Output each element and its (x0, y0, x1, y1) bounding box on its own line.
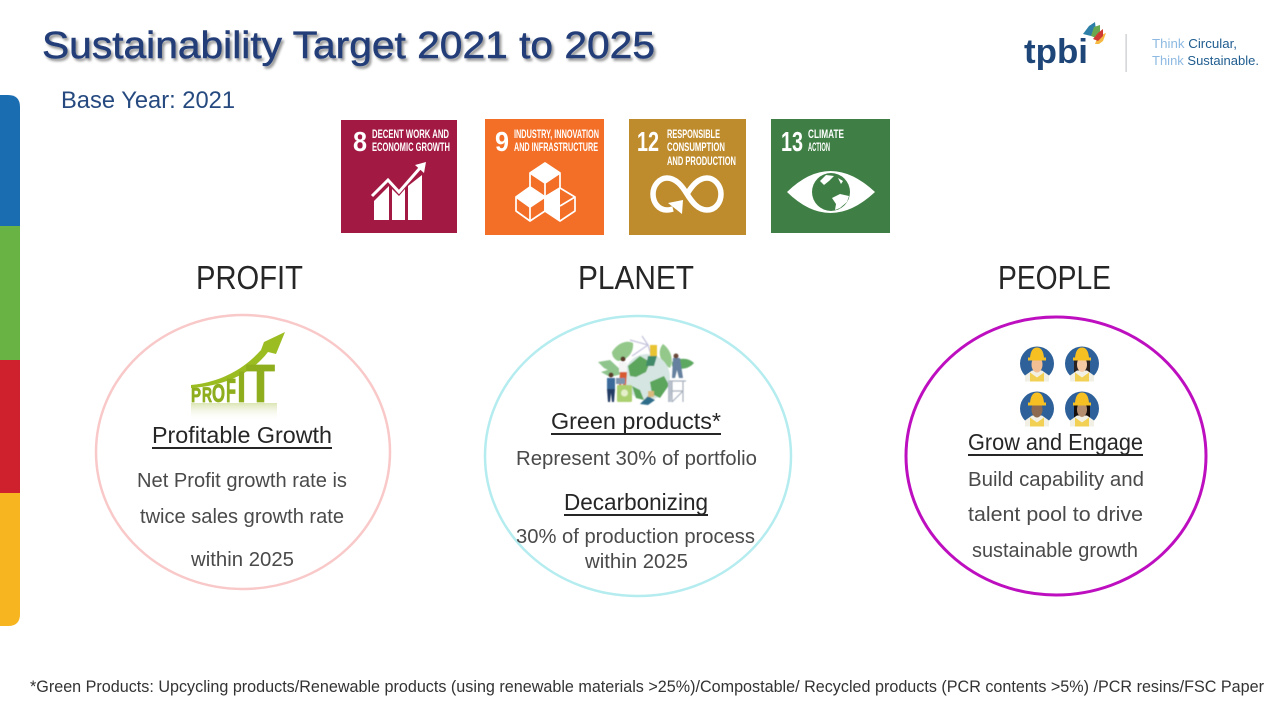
left colour bar (0, 95, 20, 626)
text: profit target: Net Profit growth rate is (137, 469, 347, 492)
logo divider (1126, 34, 1127, 72)
icon: SDG 13 climate action: ACTION (808, 142, 830, 154)
icon: SDG 9 industry: INDUSTRY, INNOVATION (514, 129, 599, 141)
icon: SDG 12 responsible consumption (629, 119, 746, 235)
icon: SDG 13 climate action (771, 119, 890, 233)
worker: top right (1065, 346, 1099, 382)
icon: profit growth arrow: P (191, 385, 201, 407)
text: decarbonizing heading: Decarbonizing (564, 489, 708, 515)
heading: profit: PROFIT (196, 259, 303, 296)
text: profitable growth heading: Profitable Growth (152, 422, 332, 448)
text: green products target: Represent 30% of portfolio (516, 447, 757, 470)
text: people target (968, 468, 1144, 562)
text: decarbonizing target: 30% of production process (516, 525, 755, 548)
panel: people circle (906, 317, 1206, 595)
icon: SDG 9 industry: 9 (495, 126, 509, 157)
text: people target: sustainable growth (972, 539, 1138, 562)
text: grow and engage heading: Grow and Engage (968, 429, 1143, 455)
logo tagline (1152, 37, 1259, 68)
icon: profit growth arrow: T (246, 354, 275, 414)
text: profit target: twice sales growth rate (140, 505, 344, 528)
icon: SDG 12 responsible consumption: RESPONSIBLE (667, 129, 720, 141)
icon: SDG 8 decent work: 8 (353, 126, 367, 157)
icon: profit growth arrow: R (202, 384, 212, 407)
title: Sustainability Target 2021 to 2025 (42, 25, 655, 67)
text: decarbonizing target: within 2025 (584, 550, 688, 573)
logo tagline: Think Sustainable. (1152, 54, 1259, 68)
icon: SDG 12 responsible consumption: AND PRODUCTION (667, 156, 736, 168)
text: people target: talent pool to drive (968, 503, 1143, 526)
text: profit target: within 2025 (190, 548, 294, 571)
heading: people: PEOPLE (998, 259, 1111, 296)
icon: SDG 12 responsible consumption: 12 (637, 126, 659, 157)
subtitle: base year: Base Year: 2021 (61, 87, 235, 114)
icon: SDG 12 responsible consumption: CONSUMPTION (667, 142, 725, 154)
panel: planet circle (485, 316, 791, 596)
logo: tpbi (1024, 22, 1259, 72)
icon: four workers (1020, 346, 1099, 426)
icon: SDG 8 decent work: DECENT WORK AND (372, 129, 449, 141)
worker: bottom left (1020, 392, 1054, 426)
worker: bottom right (1065, 392, 1099, 426)
icon: SDG 13 climate action: CLIMATE (808, 129, 844, 141)
icon: SDG 8 decent work: ECONOMIC GROWTH (372, 142, 450, 154)
text: decarbonizing target (516, 525, 755, 573)
text: green products heading: Green products* (551, 408, 721, 434)
logo leaves (1083, 22, 1106, 44)
logo tagline: Think Circular, (1152, 37, 1237, 51)
heading: planet: PLANET (578, 259, 694, 296)
logo wordmark: tpbi (1024, 33, 1088, 71)
icon: profit growth arrow: O (212, 380, 225, 408)
icon: profit growth arrow: I (237, 363, 246, 412)
icon: SDG 8 decent work (341, 120, 457, 233)
icon: SDG 9 industry: AND INFRASTRUCTURE (514, 142, 598, 154)
text: profit target (137, 469, 347, 571)
icon: profit growth arrow: F (226, 372, 236, 409)
panel: profit circle (96, 315, 390, 589)
icon: SDG 13 climate action: 13 (781, 126, 803, 157)
icon: SDG 9 industry (485, 119, 604, 235)
icon: green planet illustration (598, 336, 694, 405)
text: people target: Build capability and (968, 468, 1144, 491)
icon: profit growth arrow (191, 332, 285, 421)
worker: top left (1020, 346, 1054, 382)
